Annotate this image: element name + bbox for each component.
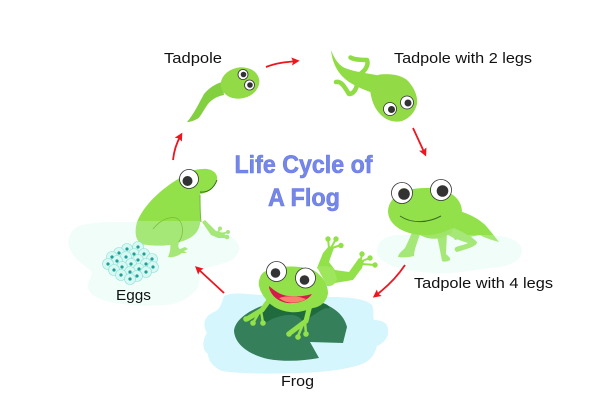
- stage: eggs pond and adult frog: [68, 169, 239, 306]
- legs: [398, 230, 450, 262]
- tail: [445, 211, 499, 242]
- pond: eggs: [68, 222, 239, 306]
- rear foot: [168, 242, 188, 257]
- pond: [377, 234, 522, 273]
- pad shadow: [258, 300, 329, 324]
- arrow: two legs to four legs: [413, 128, 425, 154]
- body: [218, 64, 262, 102]
- tongue: [279, 296, 306, 303]
- back leg: [153, 217, 182, 243]
- front legs: [247, 299, 310, 336]
- eyes: [238, 70, 248, 80]
- eyes: [266, 262, 286, 282]
- eyes: [392, 182, 412, 204]
- mouth: [200, 180, 217, 192]
- belly: [416, 226, 452, 239]
- label: frog: Frog: [281, 373, 314, 390]
- water: [203, 293, 388, 374]
- stage: frog on lily pad: [203, 236, 388, 374]
- arrow: eggs to tadpole: [173, 135, 181, 160]
- label: eggs: Eggs: [116, 287, 151, 304]
- thigh: [317, 266, 337, 286]
- head and body: [259, 266, 328, 312]
- egg cluster: [102, 242, 158, 284]
- label: tadpole with 2 legs: Tadpole with 2 legs: [394, 50, 532, 67]
- upper leg: [350, 58, 368, 74]
- title: A Flog: [268, 184, 340, 212]
- lower leg: [336, 82, 357, 94]
- smile: [400, 216, 441, 222]
- hind leg: [317, 236, 378, 283]
- front foot: [202, 220, 230, 239]
- eye: [180, 170, 198, 188]
- arrow: four legs to frog: [375, 265, 405, 296]
- eyes: [400, 96, 414, 109]
- label: tadpole with 4 legs: Tadpole with 4 legs: [414, 275, 553, 292]
- back leg: [447, 228, 477, 252]
- lily pad: [234, 300, 347, 361]
- label: tadpole: Tadpole: [164, 50, 222, 67]
- title: Life Cycle of: [234, 151, 373, 179]
- head: [388, 188, 462, 235]
- arrow: frog to eggs: [197, 268, 224, 293]
- tail: [331, 50, 382, 92]
- body: [370, 74, 417, 122]
- stage: tadpole: [187, 64, 262, 122]
- stage: tadpole with 2 legs: [331, 50, 417, 122]
- title: [234, 151, 373, 212]
- arrow: tadpole to two legs: [266, 61, 297, 67]
- frog body: [136, 169, 217, 246]
- tail: [187, 82, 224, 122]
- stage: tadpole with 4 legs: [377, 180, 522, 273]
- mouth: [269, 286, 312, 303]
